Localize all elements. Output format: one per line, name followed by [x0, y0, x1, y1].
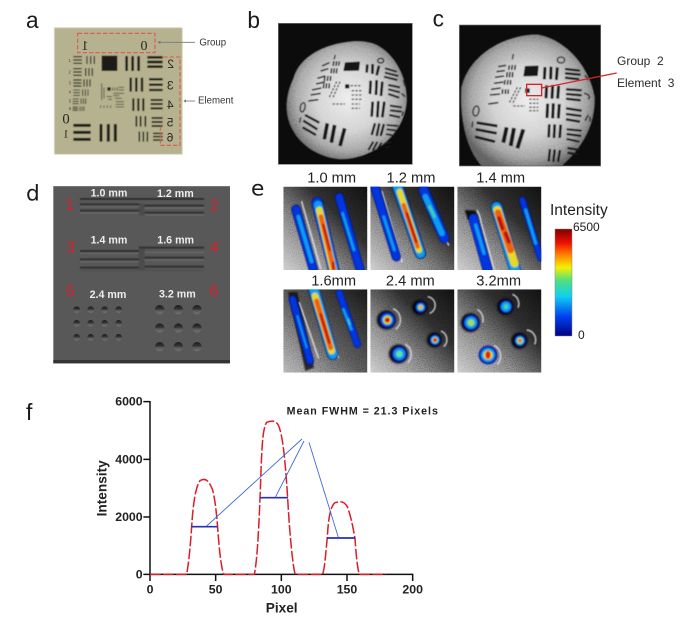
wells 3.2 mm [155, 305, 202, 351]
panel c: distorted target with selection [433, 6, 601, 166]
channel numbers: 1 [65, 197, 74, 214]
FWHM bars [192, 498, 355, 538]
x axis: 150 [337, 582, 357, 596]
channel numbers: 4 [210, 240, 219, 257]
y axis: 4000 [115, 452, 143, 466]
y axis: 0 [136, 568, 143, 582]
x axis: 100 [271, 582, 292, 596]
x axis: 50 [209, 582, 223, 596]
group and element digits: 1 [63, 128, 69, 140]
x axis: Pixel [266, 601, 298, 616]
panel label c: c [433, 6, 444, 32]
group and element digits: 6 [166, 130, 173, 144]
channel numbers: 3 [66, 239, 75, 256]
y axis [95, 395, 150, 582]
x axis: 200 [402, 582, 423, 596]
tile 1.2 mm [370, 186, 454, 270]
tile titles: 1.4 mm [476, 171, 525, 187]
y axis: 6000 [115, 395, 143, 409]
panel e: fluorescence images [251, 171, 541, 373]
callout: group 2 element 3: Element 3 [617, 76, 675, 90]
y axis: 2000 [115, 510, 143, 524]
tile 3.2 mm [457, 289, 542, 373]
channels [80, 199, 204, 271]
channel numbers [65, 197, 219, 300]
group outline [78, 33, 155, 53]
tile titles: 2.4 mm [386, 274, 435, 290]
group and element digits [62, 39, 174, 144]
group and element digits: 5 [69, 98, 72, 103]
selection leader line [542, 73, 617, 88]
element outline [160, 57, 180, 145]
tile titles: 1.0 mm [307, 171, 356, 187]
gradient bar [555, 229, 572, 336]
tile titles: 1.2 mm [387, 171, 435, 187]
element callout: Element [198, 95, 234, 106]
sphere with target [460, 32, 598, 166]
width labels: 3.2 mm [159, 289, 196, 301]
phantom block [53, 186, 230, 363]
channel numbers: 2 [210, 197, 219, 214]
panel a: USAF target photo [26, 7, 234, 154]
group and element digits: 4 [68, 90, 71, 95]
width labels: 1.2 mm [157, 188, 194, 200]
group callout [158, 38, 226, 49]
tile titles: 3.2mm [476, 274, 521, 290]
callout: group 2 element 3: Group 2 [617, 54, 664, 68]
group and element digits: 0 [62, 111, 70, 127]
panel label e: e [251, 177, 264, 202]
panel b: distorted target [247, 7, 412, 164]
panel label b: b [247, 7, 260, 33]
group and element digits: 3 [167, 78, 174, 92]
width labels: 1.4 mm [91, 234, 127, 246]
panel f label: f [26, 399, 33, 425]
group and element digits: 4 [167, 98, 174, 112]
red intensity profile [150, 421, 386, 574]
group and element digits: 3 [68, 80, 71, 85]
panel d: phantom schematic [26, 182, 230, 363]
tile 1.0 mm [283, 186, 368, 270]
panel label d: d [26, 182, 40, 207]
tile 1.6 mm [283, 289, 368, 373]
group and element digits: 6 [69, 106, 72, 111]
target plate [54, 28, 182, 154]
black frame [278, 23, 412, 164]
group and element digits: 0 [140, 39, 147, 54]
wells 2.4 mm [73, 306, 122, 341]
group and element digits: 1 [68, 58, 71, 63]
group callout: Group [199, 38, 226, 49]
group and element digits: 2 [68, 69, 71, 74]
width labels: 1.6 mm [157, 235, 194, 247]
callout: group 2 element 3 [617, 54, 675, 90]
selection box [527, 84, 542, 96]
width labels: 1.0 mm [91, 188, 127, 200]
width labels: 2.4 mm [90, 289, 126, 301]
x axis: 0 [147, 582, 154, 596]
colour scale [550, 202, 608, 342]
channel numbers: 6 [210, 283, 219, 300]
y axis: Intensity [95, 460, 110, 516]
tile titles [307, 171, 525, 290]
sphere with target [286, 40, 408, 160]
panel f: line chart [95, 395, 439, 616]
scale maximum: 6500 [573, 220, 600, 234]
scale minimum: 0 [578, 328, 585, 342]
group and element digits: 2 [167, 57, 174, 71]
group and element digits: 5 [166, 116, 173, 130]
tile 2.4 mm [370, 289, 454, 373]
black frame [459, 25, 601, 166]
chart annotation: Mean FWHM = 21.3 Pixels [287, 406, 439, 418]
group and element digits: 1 [81, 39, 88, 54]
tile 1.4 mm [457, 186, 542, 270]
scale title: Intensity [550, 202, 608, 219]
width labels [90, 188, 196, 301]
FWHM leader lines [207, 439, 338, 537]
panel label a: a [26, 7, 39, 33]
x axis [147, 574, 423, 616]
channel numbers: 5 [66, 283, 75, 300]
tile titles: 1.6mm [311, 274, 356, 290]
